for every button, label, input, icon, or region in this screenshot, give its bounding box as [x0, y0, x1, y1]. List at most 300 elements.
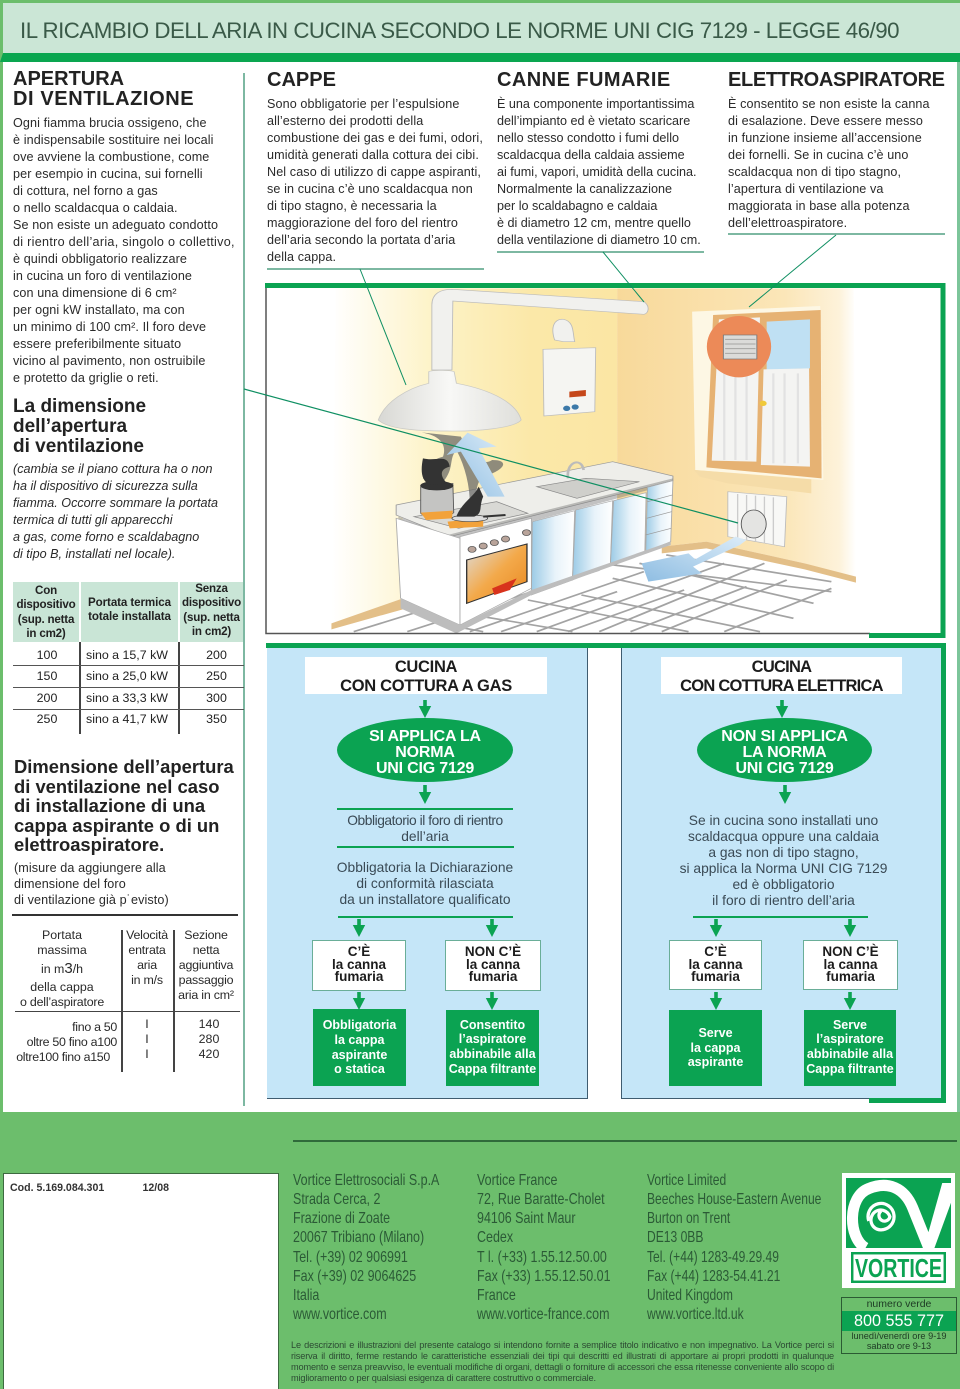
column: cappe — [267, 69, 484, 270]
header: velocita: Velocità — [126, 928, 168, 942]
heading: CANNE FUMARIE — [497, 69, 671, 91]
smoke dark — [422, 458, 483, 517]
text: maggiorata in base alla potenza — [728, 199, 910, 213]
text: È una componente importantissima — [497, 97, 694, 111]
heading box — [305, 657, 547, 694]
box: consentito: abbinabile alla — [449, 1047, 536, 1061]
rule — [728, 233, 945, 235]
box: c'e: C’È — [348, 944, 370, 959]
text: apertura: in cucina un foro di ventilazione — [13, 269, 192, 283]
wall: left — [331, 288, 617, 623]
text: foro — [347, 813, 503, 844]
floor tiles — [354, 555, 831, 632]
heading: apertura di ventilazione: APERTURA — [13, 68, 124, 90]
worktop — [396, 462, 673, 537]
header cell: portata: totale installata — [88, 610, 171, 623]
box: c'e — [669, 940, 762, 990]
heading: la dimensione: La dimensione — [13, 396, 146, 417]
title: IL RICAMBIO DELL ARIA IN CUCINA SECONDO LE NORME UNI CIG 7129 - LEGGE 46/90 — [20, 18, 899, 43]
text: norma: Se in cucina sono installati uno — [689, 813, 878, 828]
address: italia: 20067 Tribiano (Milano) — [293, 1229, 424, 1246]
sink — [537, 478, 639, 498]
heading box: CUCINA — [395, 658, 457, 676]
box: c'e: la canna — [688, 956, 743, 972]
address: uk: Tel. (+44) 1283-49.29.49 — [647, 1249, 779, 1266]
address: francia: 94106 Saint Maur — [477, 1210, 576, 1227]
box: serve aspiratore: Cappa filtrante — [806, 1062, 894, 1076]
rule — [337, 808, 513, 810]
text: apertura: e protetto da griglie o reti. — [13, 371, 159, 385]
column line — [173, 930, 174, 1072]
text: dichiarazione: Obbligatoria la Dichiarazione — [337, 860, 513, 875]
arrow — [844, 992, 856, 1010]
address: italia: www.vortice.com — [293, 1306, 387, 1323]
panel accent: right green — [941, 643, 946, 1103]
heading box: CON COTTURA ELETTRICA — [680, 677, 883, 695]
hood duct — [432, 289, 648, 370]
column: portata values: oltre100 fino a150 — [16, 1050, 110, 1064]
box: consentito: Consentito — [460, 1018, 525, 1032]
header: portata: Portata — [42, 928, 82, 942]
arrow — [352, 919, 366, 937]
box: non c'e: la canna — [823, 956, 878, 972]
header cell: senza dispositivo: (sup. netta — [183, 611, 240, 624]
header: sezione: aria in cm² — [178, 988, 234, 1002]
arrow — [776, 700, 788, 718]
box: non c'e — [803, 940, 898, 990]
header: velocita: aria — [137, 958, 157, 972]
frame: illustration green — [265, 286, 943, 636]
column: senza: 350 — [206, 712, 227, 726]
address: francia: France — [477, 1287, 516, 1304]
arrow — [486, 919, 498, 937]
address: uk: United Kingdom — [647, 1287, 733, 1304]
text: dell’aria secondo la portata d’aria — [267, 233, 455, 247]
hood — [378, 370, 521, 431]
column: sezione values: 280 — [199, 1032, 219, 1046]
header: sezione — [178, 928, 234, 1002]
box: obbligatoria: la cappa — [334, 1033, 385, 1047]
boiler — [543, 319, 596, 416]
text: nello stesso condotto i fumi dello — [497, 131, 679, 145]
ellipse: si applica: NORMA — [395, 744, 455, 761]
address: uk: Burton on Trent — [647, 1210, 730, 1227]
text: umidità generati dalla cottura dei cibi. — [267, 148, 479, 162]
column: sezione values — [198, 1017, 219, 1061]
arrow — [486, 992, 498, 1010]
column line — [121, 930, 122, 1072]
text: norma: a gas non di tipo stagno, — [708, 845, 859, 860]
address: italia: Tel. (+39) 02 906991 — [293, 1249, 408, 1266]
code box: Cod. 5.169.084.301 12/08 — [10, 1182, 169, 1194]
code box — [3, 1173, 279, 1389]
arrow: air up — [447, 433, 505, 497]
column line — [79, 642, 81, 734]
column: con: 200 — [37, 691, 57, 705]
arrow — [418, 700, 432, 718]
text: di esalazione. Deve essere messo — [728, 114, 923, 128]
text: apertura: vicino al pavimento, non ostruibile — [13, 354, 206, 368]
arrow — [352, 992, 366, 1009]
text: Sono obbligatorie per l’espulsione — [267, 97, 459, 111]
heading: dimensione dell'apertura — [14, 756, 234, 855]
text: nota dimensione: (cambia se il piano cottura ha o non — [13, 462, 213, 476]
text: misure: (misure da aggiungere alla — [14, 861, 166, 875]
box: c'e: fumaria — [335, 969, 383, 984]
pot — [420, 481, 454, 520]
row line — [13, 709, 244, 710]
column: con: 250 — [37, 712, 57, 726]
text: nota dimensione: ha il dispositivo di sicurezza sulla — [13, 479, 198, 493]
box: obbligatoria — [313, 1009, 406, 1086]
address: francia: Cedex — [477, 1229, 513, 1246]
box: obbligatoria: aspirante — [332, 1048, 387, 1062]
radiator — [728, 492, 787, 547]
box: c'e: la canna — [332, 956, 386, 972]
header cell: con dispositivo: in cm2) — [26, 627, 66, 640]
text: È consentito se non esiste la canna — [728, 97, 930, 111]
text: nota dimensione — [13, 462, 218, 561]
text: scaldacqua non di tipo stagno, — [728, 165, 901, 179]
heading box: CON COTTURA A GAS — [340, 677, 512, 695]
column: velocita values: I — [145, 1032, 149, 1046]
rule — [267, 268, 484, 270]
ellipse: non si applica — [697, 718, 872, 782]
address: uk — [647, 1171, 821, 1324]
heading: la dimensione: di ventilazione — [13, 436, 144, 457]
left border — [0, 0, 3, 1112]
ellipse: si applica — [337, 718, 513, 782]
column: velocita values: I — [145, 1047, 149, 1061]
window sill — [694, 470, 811, 493]
box: serve aspiratore: abbinabile alla — [807, 1047, 893, 1061]
text: foro: dell’aria — [401, 829, 449, 844]
header cell: senza dispositivo — [180, 582, 243, 642]
address: uk: Fax (+44) 1283-54.41.21 — [647, 1268, 780, 1285]
text: della ventilazione di diametro 10 cm. — [497, 233, 701, 247]
header cell: con dispositivo: dispositivo — [16, 598, 76, 611]
box: non c'e: NON C’È — [822, 944, 879, 959]
text: dichiarazione: da un installatore qualificato — [339, 892, 511, 907]
column: velocita values — [145, 1017, 149, 1061]
rule — [497, 251, 704, 253]
header: velocita: in m/s — [131, 973, 163, 987]
smoke — [414, 432, 503, 503]
pan — [447, 515, 506, 528]
panel: cucina a gas — [267, 648, 588, 1099]
arrow — [418, 785, 432, 804]
hours: lunedì/venerdì ore 9-19 — [851, 1331, 946, 1341]
plinth — [401, 542, 671, 633]
address: italia — [293, 1172, 440, 1323]
text: apertura: è quindi obbligatorio realizzare — [13, 252, 187, 266]
cooker and cabinets — [396, 462, 673, 633]
text: ai fumi, vapori, umidità della cucina. — [497, 165, 696, 179]
rule — [337, 846, 514, 848]
header cell: con dispositivo — [13, 582, 79, 642]
row line — [13, 687, 244, 688]
address: italia: Strada Cerca, 2 — [293, 1191, 380, 1208]
text: apertura: per esempio in cucina, sui fornelli — [13, 167, 203, 181]
text: apertura: essere preferibilmente situato — [13, 337, 181, 351]
oven flame — [492, 578, 517, 595]
column: portata values: fino a 50 — [72, 1020, 117, 1034]
heading: apertura di ventilazione — [13, 68, 194, 110]
text: dell’impianto ed è vietato scaricare — [497, 114, 690, 128]
header cell: senza dispositivo: in cm2) — [192, 625, 231, 638]
column: velocita values: I — [145, 1017, 149, 1031]
text — [497, 96, 701, 247]
hob — [414, 502, 528, 528]
text: apertura — [13, 116, 235, 385]
box: non c'e: NON C’È — [465, 944, 521, 959]
disclaimer: Le descrizioni e illustrazioni del presente catalogo si intendono fornite a semplice titolo indicativo e non impegnativo. La Vortice perci si riserva il diritto, ferme restando le caratteristiche essenziali dei tipi qui descritti ed illustrati di apportare ai propri prodotti in qualunque momento e senza preavviso, le eventuali modifiche di organi, dettagli o forniture di accessori che essa ritenesse conveniente allo scopo di miglioramento o per qualsiasi esigenza di carattere costruttivo o commerciale. — [291, 1340, 834, 1383]
column: senza: 250 — [206, 669, 227, 683]
text: della cappa. — [267, 250, 336, 264]
text: apertura: o nello scaldacqua o caldaia. — [13, 201, 178, 215]
text: di tipo stagno, è necessaria la — [267, 199, 437, 213]
text: misure: dimensione del foro — [14, 877, 126, 891]
text: norma: ed è obbligatorio — [732, 877, 835, 892]
row line — [13, 665, 244, 666]
text: misure: di ventilazione già p˙evisto) — [14, 893, 169, 907]
arrow — [778, 785, 792, 804]
column: portata: sino a 25,0 kW — [86, 669, 168, 683]
column: con — [37, 648, 57, 726]
heading: dimensione dell'apertura: di ventilazione nel caso — [14, 776, 219, 797]
leader line: canna fumaria — [603, 252, 644, 302]
text: all’esterno dei prodotti della — [267, 114, 423, 128]
box: serve: Serve — [698, 1026, 733, 1040]
address: francia — [477, 1172, 611, 1323]
arrow — [710, 919, 722, 937]
column: sezione values: 140 — [199, 1017, 219, 1031]
address: uk: DE13 0BB — [647, 1229, 703, 1246]
text: dichiarazione: di conformità rilasciata — [356, 876, 494, 891]
header: sezione: aggiuntiva — [179, 958, 233, 972]
text — [267, 97, 483, 264]
header: portata — [20, 928, 104, 1009]
text: apertura: di rientro dell’aria, singolo o collettivo, — [13, 235, 235, 249]
column: senza: 300 — [206, 691, 227, 705]
box: consentito — [446, 1010, 539, 1086]
box: obbligatoria: Obbligatoria — [323, 1018, 396, 1032]
heading: CAPPE — [267, 69, 336, 91]
footer — [0, 1112, 960, 1389]
frame: illustration left and bottom — [266, 286, 870, 634]
text: foro: Obbligatorio il foro di rientro — [347, 813, 503, 828]
box: consentito: Cappa filtrante — [449, 1062, 536, 1076]
ellipse: non si applica: LA NORMA — [742, 744, 827, 761]
address: italia: Frazione di Zoate — [293, 1210, 390, 1227]
address: italia: Italia — [293, 1287, 319, 1304]
ellipse: si applica: UNI CIG 7129 — [376, 760, 474, 777]
address: uk: Vortice Limited — [647, 1172, 726, 1189]
text: apertura: con una dimensione di 6 cm² — [13, 286, 177, 300]
column: portata: sino a 15,7 kW — [86, 648, 168, 662]
text: apertura: Se non esiste un adeguato condotto — [13, 218, 218, 232]
ellipse: non si applica: NON SI APPLICA — [721, 728, 848, 745]
worktop front — [398, 478, 673, 541]
panel accent: bottom green — [869, 1098, 946, 1103]
column: senza: 200 — [206, 648, 227, 662]
box: obbligatoria: o statica — [334, 1062, 385, 1076]
text: dell’elettroaspiratore. — [728, 216, 847, 230]
heading: dimensione dell'apertura: cappa aspirante o di un — [14, 815, 219, 836]
text: nota dimensione: a gas, come forno e scaldabagno — [13, 530, 199, 544]
panel: cucina elettrica — [621, 648, 941, 1099]
header cell: senza dispositivo: dispositivo — [182, 596, 241, 609]
box: non c'e: la canna — [466, 956, 520, 972]
drawers — [646, 481, 673, 552]
address: uk: www.vortice.ltd.uk — [647, 1306, 744, 1323]
logo mark — [846, 1178, 951, 1248]
title band — [0, 0, 960, 62]
header: sezione: Sezione — [184, 928, 228, 942]
text: Nel caso di utilizzo di cappe aspiranti, — [267, 165, 481, 179]
heading: apertura di ventilazione: DI VENTILAZIONE — [13, 88, 194, 110]
heading: dimensione dell'apertura: Dimensione dell’apertura — [14, 756, 234, 777]
heading: ELETTROASPIRATORE — [728, 69, 945, 91]
arrow — [710, 992, 722, 1010]
address: francia: Vortice France — [477, 1172, 557, 1189]
text: l’apertura di ventilazione va — [728, 182, 884, 196]
box: consentito: l’aspiratore — [459, 1032, 526, 1046]
heading: la dimensione — [13, 396, 146, 457]
header cell: con dispositivo: Con — [35, 584, 57, 597]
address: francia: www.vortice-france.com — [477, 1306, 609, 1323]
address: italia: Vortice Elettrosociali S.p.A — [293, 1172, 439, 1189]
header: sezione: netta — [193, 943, 219, 957]
box: serve: la cappa — [690, 1041, 741, 1055]
text: per lo scaldabagno e caldaia — [497, 199, 657, 213]
box: serve — [669, 1010, 762, 1086]
text: norma: scaldacqua oppure una caldaia — [688, 829, 879, 844]
hours — [842, 1332, 956, 1351]
column: con: 100 — [37, 648, 57, 662]
arrow — [844, 919, 856, 937]
table: portata termica — [13, 582, 244, 734]
text: apertura: ove avviene la combustione, come — [13, 150, 209, 164]
cabinet doors — [531, 511, 575, 595]
address: francia: 72, Rue Baratte-Cholet — [477, 1191, 605, 1208]
text: norma — [680, 813, 887, 908]
text: apertura: un minimo di 100 cm². Il foro deve — [13, 320, 206, 334]
address: italia: Fax (+39) 02 9064625 — [293, 1268, 416, 1285]
box: serve: aspirante — [688, 1055, 743, 1069]
panel background: green band — [266, 643, 946, 648]
column: sezione values: 420 — [199, 1047, 219, 1061]
text: norma: si applica la Norma UNI CIG 7129 — [680, 861, 887, 876]
text: in funzione insieme all’accensione — [728, 131, 922, 145]
address: francia: Fax (+33) 1.55.12.50.01 — [477, 1268, 611, 1285]
footer rule — [293, 1140, 957, 1142]
text: apertura: Ogni fiamma brucia ossigeno, che — [13, 116, 207, 130]
text: dei fornelli. Se in cucina c’è uno — [728, 148, 909, 162]
knobs — [468, 530, 531, 552]
rule — [338, 916, 513, 918]
header cell: senza dispositivo: Senza — [195, 582, 228, 595]
column line — [178, 642, 180, 734]
header cell: portata: Portata termica — [88, 596, 171, 609]
heading box — [661, 657, 902, 694]
text: nota dimensione: fiamma. Occorre sommare la portata — [13, 496, 218, 510]
arrow: air down — [642, 537, 747, 582]
phone: 800 555 777 — [854, 1312, 944, 1330]
text: nota dimensione: di tipo B, installati nel locale). — [13, 547, 175, 561]
window — [692, 306, 823, 480]
box: serve aspiratore: Serve — [833, 1018, 867, 1032]
text: nota dimensione: termica di tutti gli apparecchi — [13, 513, 173, 527]
text: apertura: è indispensabile sostituire nei locali — [13, 133, 214, 147]
wall: right — [617, 288, 856, 580]
cooker front — [396, 518, 460, 625]
header: sezione: passaggio — [179, 973, 233, 987]
box: non c'e: fumaria — [469, 969, 517, 984]
ellipse: non si applica: UNI CIG 7129 — [735, 760, 834, 777]
header: velocita — [126, 928, 168, 987]
text: misure — [14, 861, 169, 907]
text: è di diametro 12 cm, mentre quello — [497, 216, 691, 230]
right border — [957, 0, 960, 1112]
column: portata: sino a 33,3 kW — [86, 691, 168, 705]
text: scaldacqua della caldaia assieme — [497, 148, 685, 162]
text: apertura: di cottura, nel forno a gas — [13, 184, 158, 198]
header: portata: o dell’aspiratore — [20, 995, 104, 1009]
heading: dimensione dell'apertura: di installazione di una — [14, 795, 205, 816]
text: Normalmente la canalizzazione — [497, 182, 672, 196]
column: portata — [86, 648, 168, 726]
heading: la dimensione: dell’apertura — [13, 416, 127, 437]
skirting — [331, 598, 403, 629]
leader line: elettroaspiratore — [749, 235, 836, 307]
divider — [12, 914, 238, 916]
heading: dimensione dell'apertura: elettroaspiratore. — [14, 834, 164, 855]
box: c'e: fumaria — [691, 969, 740, 984]
tap — [568, 462, 584, 478]
box: non c'e — [445, 940, 541, 991]
table: portata massima — [15, 928, 240, 1072]
row line — [15, 1011, 240, 1012]
text: combustione dei gas e dei fumi, odori, — [267, 131, 483, 145]
logo: vortice — [842, 1173, 955, 1288]
address: uk: Beeches House-Eastern Avenue — [647, 1191, 821, 1208]
hours: sabato ore 9-13 — [867, 1340, 931, 1350]
oven window — [467, 544, 527, 603]
box: c'e: C’È — [704, 944, 727, 959]
header cell: portata — [81, 582, 178, 642]
numero verde — [841, 1297, 957, 1354]
column: portata values: oltre 50 fino a100 — [27, 1035, 117, 1049]
column: con: 150 — [37, 669, 57, 683]
column: portata values — [16, 1020, 117, 1064]
box: c'e — [312, 940, 406, 991]
column: senza — [206, 648, 227, 726]
text: se in cucina c’è uno scaldacqua non — [267, 182, 473, 196]
text: apertura: per ogni kW installato, ma con — [13, 303, 185, 317]
box: serve aspiratore: l’aspiratore — [816, 1032, 884, 1046]
leader line: cappa — [360, 269, 406, 385]
leader line: apertura — [244, 389, 738, 523]
heading box: CUCINA — [752, 658, 811, 676]
header cell: con dispositivo: (sup. netta — [18, 613, 74, 626]
column: portata: sino a 41,7 kW — [86, 712, 168, 726]
header: portata: in m3/h — [41, 960, 83, 977]
header: portata: massima — [37, 943, 87, 957]
ellipse: si applica: SI APPLICA LA — [369, 728, 481, 745]
box: serve aspiratore — [804, 1010, 896, 1086]
column: canne fumarie — [497, 69, 704, 253]
